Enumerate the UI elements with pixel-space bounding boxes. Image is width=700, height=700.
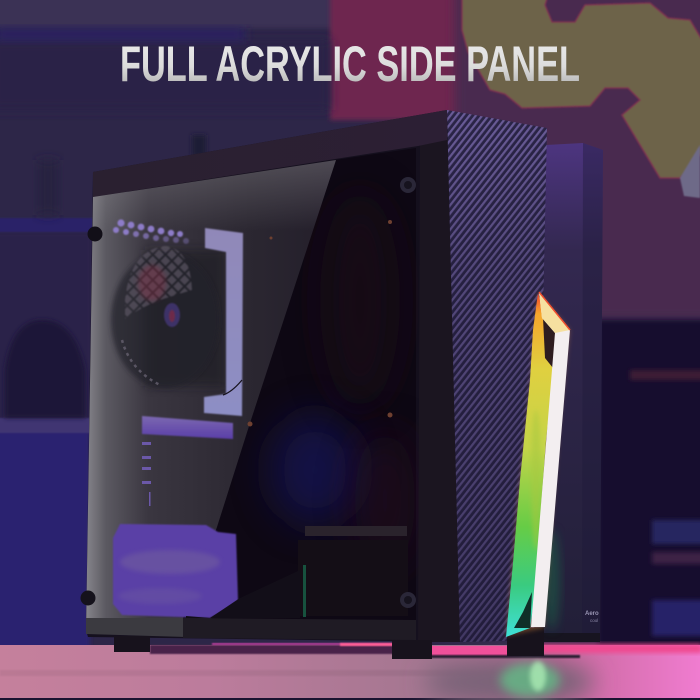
- front carbon panel: [447, 110, 547, 642]
- expansion slots: [142, 442, 151, 506]
- logo: [585, 611, 599, 623]
- honeycomb vent: [113, 219, 189, 244]
- fan cable: [223, 380, 242, 395]
- background shelves: [0, 28, 245, 433]
- pc case: [80, 110, 603, 659]
- psu cables: [186, 570, 300, 618]
- case feet: [114, 628, 544, 659]
- interior standoffs: [248, 220, 392, 426]
- interior dark: [183, 148, 416, 620]
- logo: cool: [590, 618, 598, 623]
- psu opening: [113, 524, 238, 618]
- table top: [0, 643, 700, 700]
- logo: Aero: [585, 611, 599, 617]
- rear panel of front section: [536, 143, 603, 633]
- rgb light strip: [506, 292, 570, 637]
- hexagon wall decoration: [462, 0, 700, 198]
- background dark object right: [598, 320, 700, 650]
- motherboard tray bar: [142, 416, 233, 439]
- top case band: [93, 110, 447, 197]
- rear fan: [111, 246, 225, 388]
- case side body: [86, 110, 462, 642]
- white bracket: [204, 228, 243, 416]
- acrylic reflection: [86, 160, 336, 632]
- green glow on rear panel: [544, 530, 560, 630]
- right case frame: [418, 110, 460, 642]
- drive cage and psu shape: [305, 526, 407, 536]
- bottom rail: [86, 618, 186, 637]
- acrylic standoff screws: [80, 177, 416, 608]
